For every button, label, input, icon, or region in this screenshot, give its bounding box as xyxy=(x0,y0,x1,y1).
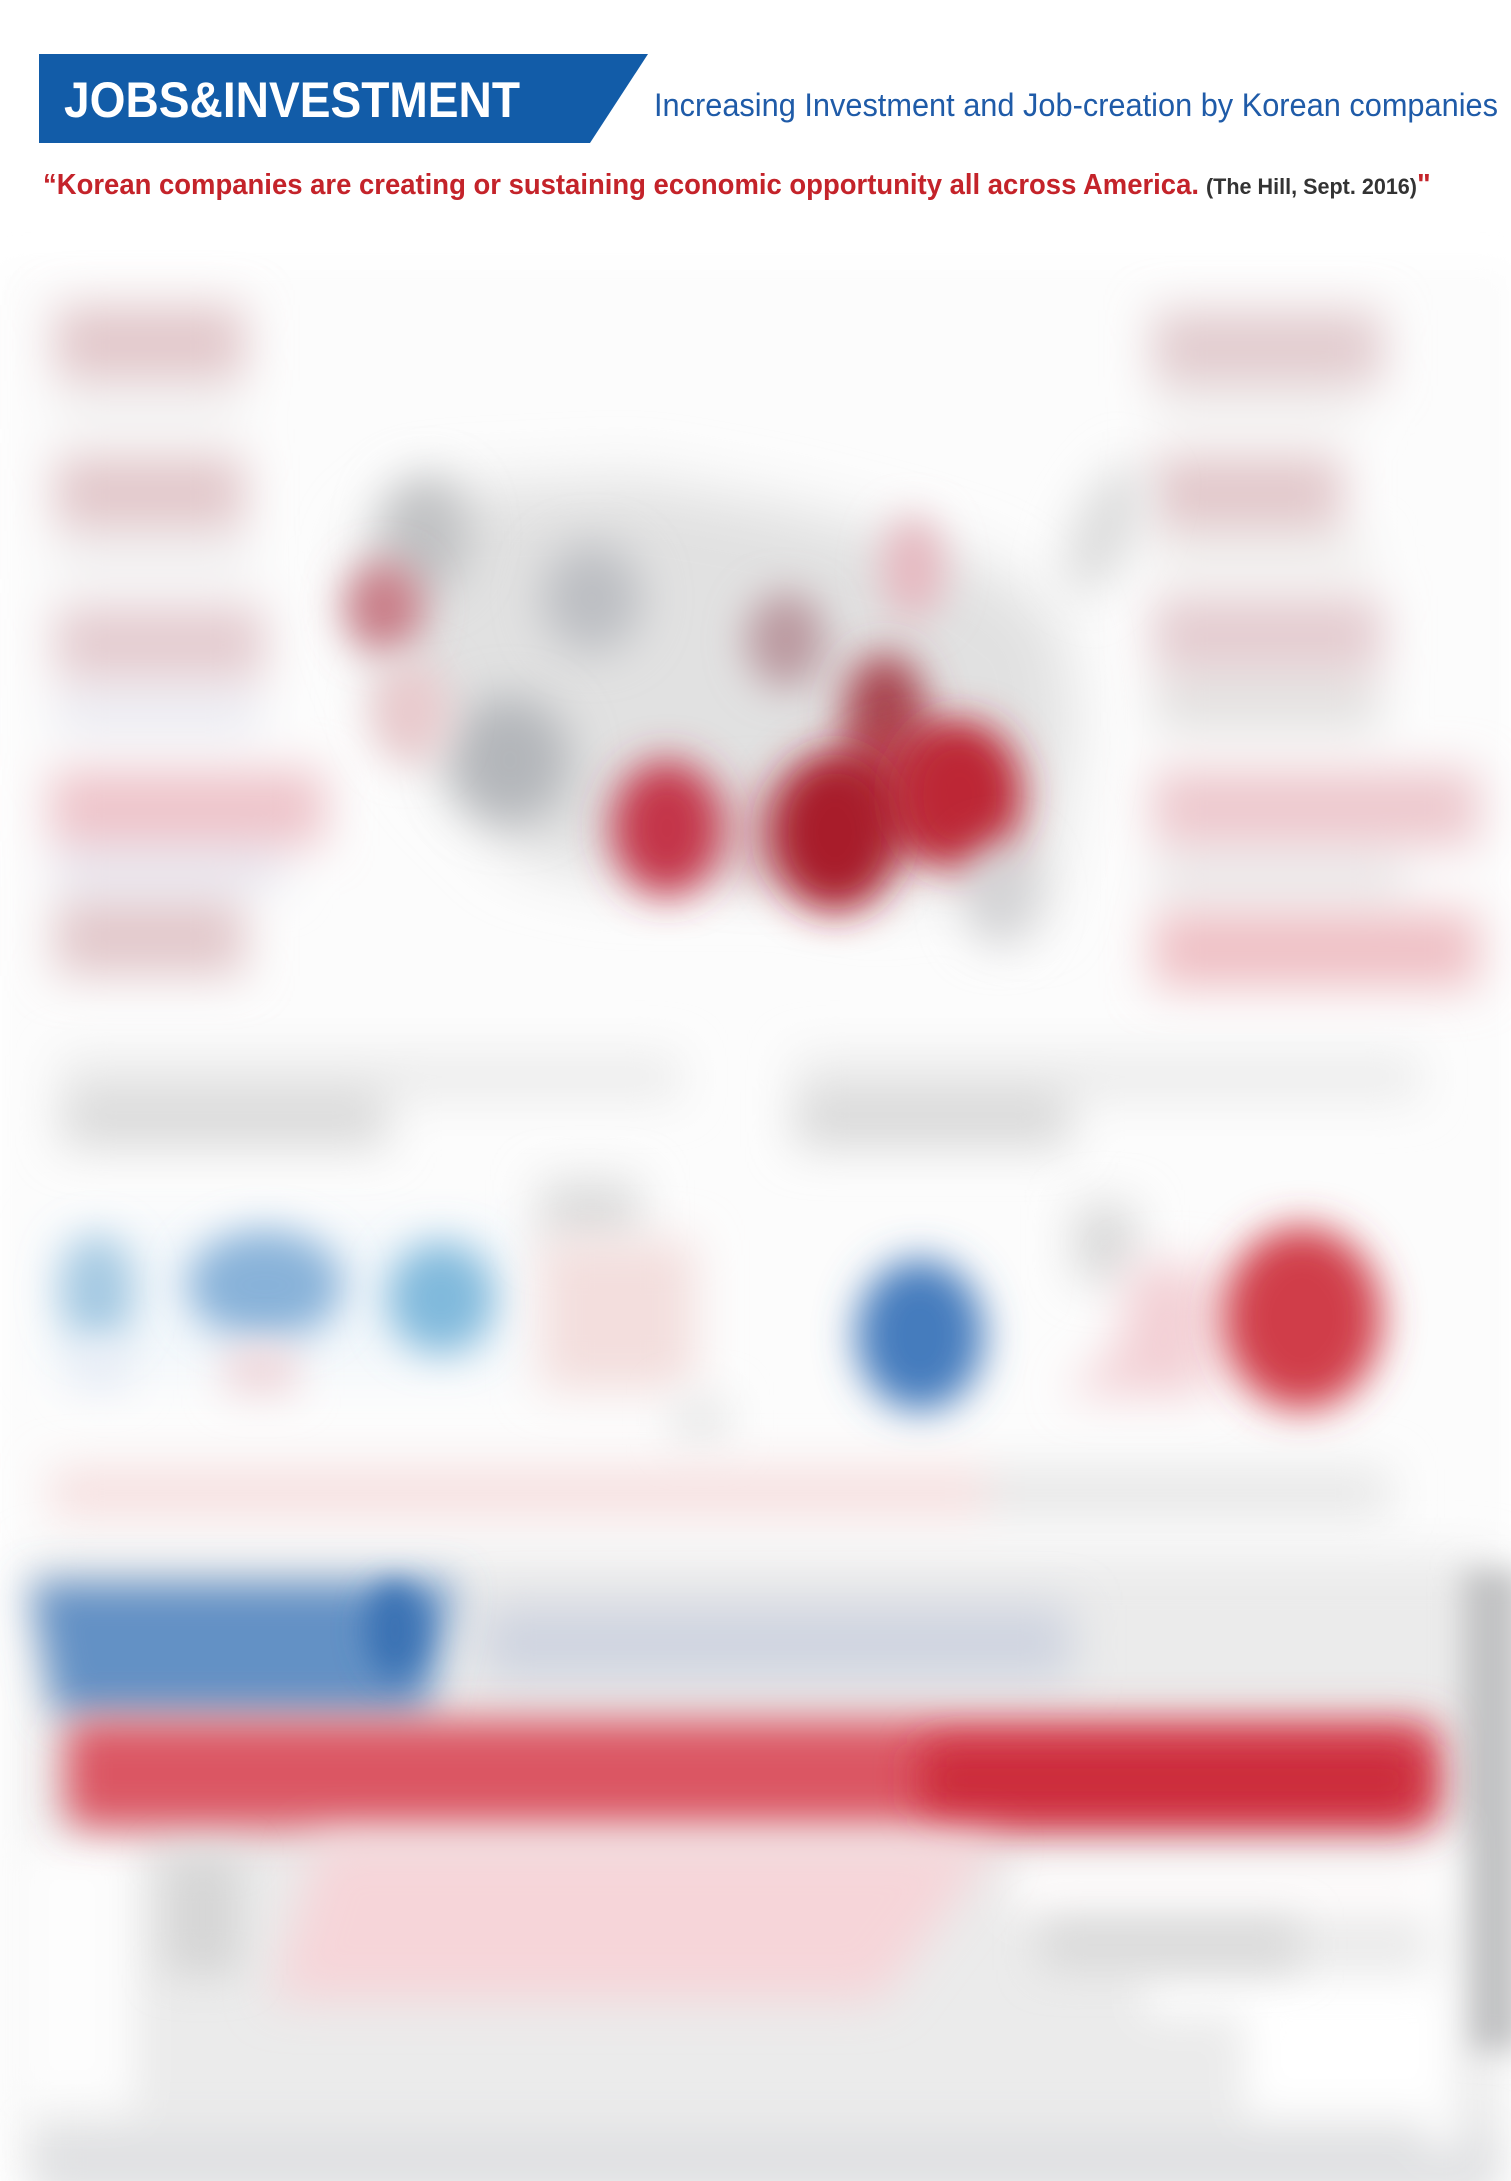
shaded bubble connecting area xyxy=(835,730,985,850)
right gray column xyxy=(1462,1570,1511,2050)
gray footnote xyxy=(670,1395,730,1445)
pink text block (blurred) xyxy=(270,1840,1000,2000)
florida gray xyxy=(965,845,1035,945)
two section headings (blurred) xyxy=(60,1055,1420,1147)
right comparison chart (blurred) xyxy=(856,1205,1382,1411)
gray state darker areas xyxy=(381,477,469,593)
large bubble: southeast xyxy=(769,752,901,912)
quote: " xyxy=(1417,169,1431,201)
blue bubble 3 xyxy=(387,1242,495,1354)
medium bubble: upper southeast xyxy=(843,653,927,777)
pink arrow area xyxy=(1065,1265,1210,1395)
red circle xyxy=(1222,1226,1382,1410)
left comparison chart (blurred) xyxy=(45,1180,730,1445)
blue circle xyxy=(856,1259,984,1411)
pale bubble: southwest xyxy=(370,660,450,764)
connecting tint between bubbles xyxy=(720,790,800,880)
pink list xyxy=(540,1240,695,1390)
gray header above list xyxy=(540,1180,640,1245)
blue tab heading xyxy=(30,1582,455,1715)
large bubble: texas xyxy=(611,760,723,896)
large bubble: east xyxy=(898,721,1022,869)
map landmass xyxy=(360,480,1075,930)
gray text blocks (blurred) xyxy=(165,1855,1300,1975)
US map (blurred) xyxy=(344,454,1162,945)
pale blue band xyxy=(45,1225,515,1375)
quote: (The Hill, Sept. 2016) xyxy=(1206,174,1417,199)
gray label xyxy=(1075,1205,1135,1280)
lower gray panel (blurred) xyxy=(30,1555,1500,2181)
pink bubble: midwest xyxy=(746,592,826,688)
right column labels (blurred) xyxy=(1153,310,1479,988)
white areas around the lower text xyxy=(10,1830,1455,2150)
blue bubble 2 xyxy=(187,1230,343,1340)
header banner xyxy=(39,54,648,143)
bottom band xyxy=(40,2130,1490,2181)
blue bubble 1 xyxy=(59,1235,135,1345)
header banner: JOBS&INVESTMENT xyxy=(64,72,520,128)
quote: “Korean companies are creating or sustaining economic opportunity all across America. xyxy=(43,169,1199,201)
northeast strip xyxy=(1048,454,1162,606)
subtitle: Increasing Investment and Job-creation by Korean companies xyxy=(654,87,1498,123)
pale blue subheading band xyxy=(482,1605,1072,1680)
small caption pink xyxy=(225,1345,297,1395)
statement line (blurred) xyxy=(50,1468,1390,1518)
pink bubble: great lakes xyxy=(881,516,945,620)
small caption pale blue xyxy=(70,1345,130,1390)
pale bubble: west coast xyxy=(344,561,424,653)
red highlighted bar xyxy=(65,1720,1440,1828)
left column labels (blurred) xyxy=(50,305,325,976)
